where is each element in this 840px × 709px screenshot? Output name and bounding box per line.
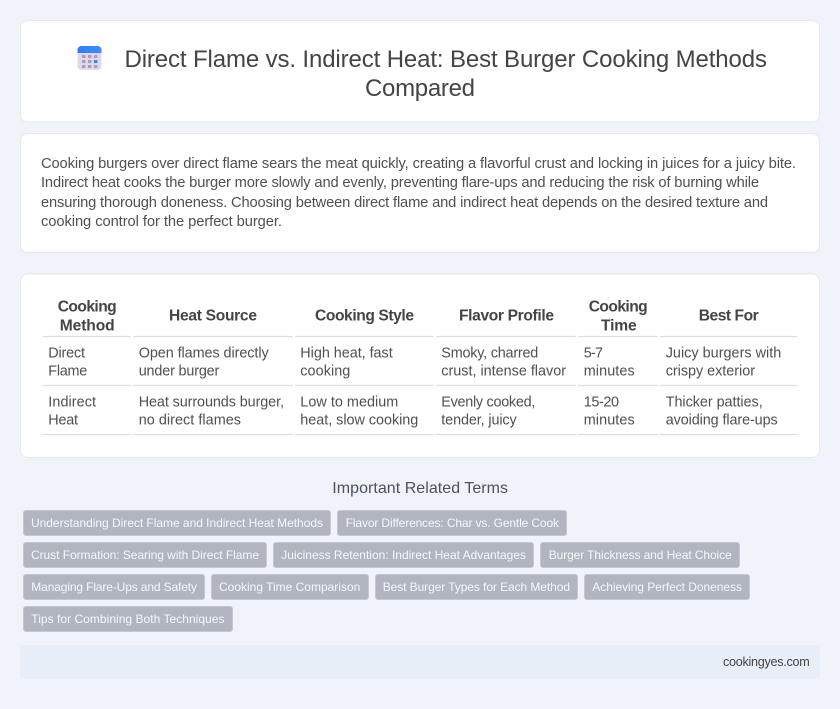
table header row: Heat Source [169,308,257,324]
panel: related term tags [24,510,750,632]
table row: direct flame: Direct [48,346,85,362]
table row: direct flame: Flame [48,364,87,380]
table row: indirect heat: minutes [584,413,635,429]
heading: important related terms: Important Related Terms [332,480,508,497]
table header row: Time [601,318,637,335]
title: Direct Flame vs. Indirect Heat: Best Burger Cooking Methods [124,46,767,73]
table header row: Cooking [58,299,117,316]
table row: indirect heat: Indirect [48,395,96,411]
table row: direct flame: under burger [139,364,220,380]
table row: direct flame: Open flames directly [139,346,269,362]
tag [24,510,330,536]
table row: direct flame: cooking [300,364,350,380]
table header row: Cooking [589,299,648,316]
text block: introduction paragraph: cooking control for the perfect burger. [41,214,282,230]
text block: introduction paragraph [41,156,796,230]
table row: direct flame: minutes [584,364,635,380]
table row: indirect heat: heat, slow cooking [300,413,418,429]
tag [24,542,266,568]
tag [212,574,368,600]
footer: cookingyes.com [723,655,810,669]
table row: indirect heat: no direct flames [139,413,241,429]
tag: Cooking Time Comparison [219,580,360,594]
table row: direct flame: High heat, fast [300,346,393,362]
table row: indirect heat: 15-20 [584,395,619,411]
table header row: Flavor Profile [459,308,554,324]
table header row: Best For [699,308,759,324]
title: Compared [365,75,475,102]
tag [376,574,578,600]
tag: Achieving Perfect Doneness [592,580,742,594]
tag: Best Burger Types for Each Method [383,580,570,594]
table row: indirect heat: Thicker patties, [666,395,763,411]
table header row: Cooking Style [315,308,414,324]
table header row: Method [60,318,115,335]
table row: direct flame: crispy exterior [666,364,755,380]
tag: Flavor Differences: Char vs. Gentle Cook [346,516,560,530]
tag: Tips for Combining Both Techniques [31,612,224,626]
text block: introduction paragraph: ensuring thorough doneness. Choosing between direct flame and indirect heat depends on the desired texture and [41,195,768,211]
table row: indirect heat [48,395,778,429]
tag [338,510,566,536]
footer [20,645,820,679]
table row: direct flame [48,346,781,380]
icon: calendar [78,46,102,70]
table row: indirect heat: Heat [48,413,78,429]
text block: introduction paragraph: Indirect heat cooks the burger more slowly and evenly, preventing flare-ups and reducing the risk of burning while [41,175,759,191]
title [124,46,767,102]
table row: direct flame: Juicy burgers with [666,346,781,362]
text block: introduction paragraph: Cooking burgers over direct flame sears the meat quickly, creating a flavorful crust and locking in juices for a juicy bite. [41,156,796,172]
tag: Understanding Direct Flame and Indirect Heat Methods [31,516,323,530]
table row: indirect heat: Low to medium [300,395,398,411]
table row: indirect heat: avoiding flare-ups [666,413,778,429]
tag [540,542,740,568]
tag: Managing Flare-Ups and Safety [31,580,197,594]
tag: Juiciness Retention: Indirect Heat Advantages [281,548,526,562]
table row: direct flame: 5-7 [584,346,603,362]
table header row [58,299,759,335]
tag [24,574,204,600]
table row: direct flame: crust, intense flavor [441,364,566,380]
panel: title card [20,20,820,122]
tag [584,574,750,600]
tag: Crust Formation: Searing with Direct Flame [31,548,259,562]
panel: introduction [20,134,820,252]
tag [24,606,232,632]
table row: indirect heat: tender, juicy [441,413,517,429]
table row: indirect heat: Evenly cooked, [441,395,535,411]
panel: comparison table [20,274,820,458]
table row: direct flame: Smoky, charred [441,346,538,362]
tag [274,542,534,568]
table row: indirect heat: Heat surrounds burger, [139,395,284,411]
tag: Burger Thickness and Heat Choice [549,548,732,562]
